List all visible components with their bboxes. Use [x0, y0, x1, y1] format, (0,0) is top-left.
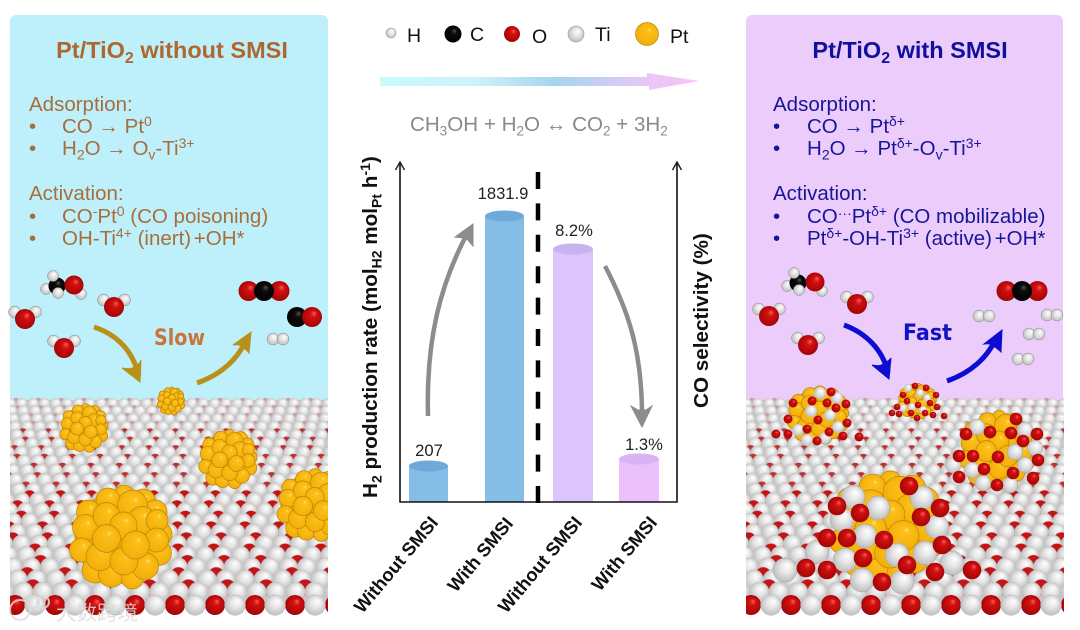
- text block: adsorption with SMSI: δ+: [889, 113, 905, 129]
- legend: atom key: Pt: [670, 26, 689, 48]
- legend: atom key: O: [532, 26, 547, 48]
- panel title: with SMSI: Pt/TiO: [812, 37, 881, 63]
- text block: adsorption with SMSI: [773, 93, 982, 162]
- text block: adsorption with SMSI: O → Pt: [830, 137, 897, 160]
- secondary y axis title: CO selectivity: CO selectivity (%): [690, 233, 713, 408]
- equation: methanol steam reforming: 2: [660, 124, 668, 138]
- text block: adsorption with SMSI: -O: [913, 137, 936, 160]
- panel background: without SMSI: [10, 15, 328, 601]
- arrow: gradient process arrow: [380, 73, 699, 90]
- panel title: without SMSI: Pt/TiO: [56, 37, 125, 63]
- text block: adsorption with SMSI: Adsorption:: [773, 93, 877, 116]
- TiO2 surface lattice, left: [10, 396, 328, 617]
- text block: adsorption with SMSI: δ+: [897, 135, 913, 151]
- value labels: 1831.9: [478, 184, 528, 203]
- arrow: reactants to Pt, slow: [94, 327, 141, 382]
- value labels: 1.3%: [625, 435, 663, 454]
- category labels: With SMSI: [443, 513, 517, 596]
- text block: activation with SMSI: Activation:: [773, 182, 868, 205]
- text block: activation with SMSI: δ+: [826, 225, 842, 241]
- text block: activation without SMSI: (CO poisoning): [125, 205, 268, 228]
- panel: Pt/TiO2 with SMSI: [746, 15, 1064, 617]
- arrow: selectivity decrease: [605, 266, 652, 427]
- text block: adsorption with SMSI: H: [807, 137, 822, 160]
- text block: activation without SMSI: (inert): [132, 227, 191, 250]
- arrow: reactants to Pt, fast: [844, 325, 891, 379]
- panel title: without SMSI: without SMSI: [134, 37, 288, 63]
- text block: activation with SMSI: δ+: [871, 203, 887, 219]
- divider: dashed line between metrics: [536, 172, 540, 503]
- product molecules, right: [973, 281, 1063, 365]
- label: Fast: Fast: [903, 320, 952, 346]
- category labels: Without SMSI: [493, 512, 586, 617]
- text block: adsorption with SMSI: •: [773, 137, 780, 160]
- y axis title: H2 production rate: 2: [368, 475, 384, 483]
- chart: H2 production rate and CO selectivity: [349, 156, 713, 617]
- y axis title: H2 production rate: Pt: [368, 194, 384, 208]
- value labels: 8.2%: [555, 221, 593, 240]
- text block: activation with SMSI: -OH-Ti: [842, 227, 903, 250]
- axes: [396, 162, 682, 502]
- text block: adsorption without SMSI: Adsorption:: [29, 93, 133, 116]
- y axis title: H2 production rate: H: [359, 483, 382, 498]
- text block: adsorption without SMSI: O → O: [85, 137, 148, 160]
- y axis title: H2 production rate: H2: [368, 250, 384, 268]
- text block: activation without SMSI: Activation:: [29, 182, 124, 205]
- text block: activation with SMSI: •: [773, 205, 780, 228]
- equation: methanol steam reforming: OH + H: [447, 113, 516, 136]
- category labels: With SMSI: [587, 512, 661, 595]
- encapsulated small Pt cluster: [889, 383, 947, 421]
- y axis title: H2 production rate: ): [359, 156, 382, 163]
- text block: adsorption without SMSI: •: [29, 137, 36, 160]
- text block: adsorption without SMSI: H: [62, 137, 77, 160]
- text block: activation without SMSI: -: [93, 203, 98, 219]
- bar: CO selectivity with SMSI: [619, 454, 659, 502]
- y axis title: H2 production rate: production rate (mol: [359, 268, 382, 475]
- text block: adsorption without SMSI: 0: [144, 113, 152, 129]
- text block: activation with SMSI: +OH*: [989, 227, 1045, 250]
- text block: activation with SMSI: Pt: [852, 205, 871, 228]
- text block: activation with SMSI: [773, 182, 1045, 250]
- encapsulated upper-left Pt cluster: [772, 386, 864, 449]
- legend: atom key: Ti: [595, 24, 611, 46]
- text block: activation without SMSI: 4+: [116, 225, 132, 241]
- equation: methanol steam reforming: O ↔ CO: [524, 113, 603, 136]
- text block: adsorption without SMSI: 3+: [179, 135, 195, 151]
- text block: adsorption with SMSI: 3+: [966, 135, 982, 151]
- value labels: [415, 184, 663, 460]
- Pt clusters on support, left: [60, 387, 349, 589]
- text block: activation with SMSI: CO: [807, 205, 838, 228]
- legend: atom key: H: [407, 25, 421, 47]
- encapsulated large Pt cluster: [773, 471, 981, 594]
- text block: adsorption with SMSI: -Ti: [943, 137, 966, 160]
- panel title: without SMSI: 2: [125, 50, 134, 67]
- text block: adsorption with SMSI: CO → Pt: [807, 115, 889, 138]
- text block: activation with SMSI: (CO mobilizable): [887, 205, 1045, 228]
- y axis title: H2 production rate: -1: [357, 163, 373, 176]
- text block: adsorption without SMSI: -Ti: [155, 137, 179, 160]
- arrow: Pt to products, slow: [197, 332, 251, 383]
- equation: methanol steam reforming: 2: [603, 124, 610, 138]
- equation: methanol steam reforming: + 3H: [610, 113, 660, 136]
- equation: methanol steam reforming: CH: [410, 113, 440, 136]
- category labels: Without SMSI: [349, 512, 442, 617]
- text block: adsorption without SMSI: •: [29, 115, 36, 138]
- text block: activation without SMSI: +OH*: [188, 227, 245, 250]
- reactant molecules, left: [8, 270, 130, 358]
- equation: methanol steam reforming: 3: [440, 124, 447, 138]
- panel title: with SMSI: with SMSI: [890, 37, 1008, 63]
- text block: activation without SMSI: •: [29, 205, 36, 228]
- text block: activation without SMSI: 0: [117, 203, 125, 219]
- text block: activation without SMSI: OH-Ti: [62, 227, 116, 250]
- text block: adsorption with SMSI: v: [936, 146, 943, 162]
- watermark icon: [10, 596, 49, 620]
- text block: activation with SMSI: (active): [919, 227, 992, 250]
- panel background: with SMSI: [746, 15, 1063, 601]
- equation: methanol steam reforming: 2: [516, 124, 524, 138]
- text block: adsorption without SMSI: v: [148, 146, 155, 162]
- panel title: with SMSI: 2: [881, 50, 890, 67]
- text block: adsorption with SMSI: •: [773, 115, 780, 138]
- text block: activation with SMSI: 3+: [903, 225, 919, 241]
- text block: adsorption without SMSI: CO → Pt: [62, 115, 144, 138]
- bar: H2 rate with SMSI: [485, 210, 524, 502]
- encapsulated right Pt cluster: [945, 410, 1044, 493]
- text block: activation with SMSI: ···: [838, 205, 852, 221]
- arrow: rate increase: [428, 224, 473, 416]
- y axis title: H2 production rate: h: [359, 176, 382, 194]
- text block: adsorption without SMSI: 2: [77, 146, 85, 162]
- TiO2 surface lattice, right: [746, 396, 1064, 617]
- legend: atom key: C: [470, 24, 484, 46]
- text block: activation without SMSI: CO: [62, 205, 93, 228]
- reactant molecules, right: [752, 268, 874, 355]
- text block: activation without SMSI: •: [29, 227, 36, 250]
- value labels: 207: [415, 441, 443, 460]
- panel: Pt/TiO2 without SMSI: [8, 15, 349, 617]
- label: Slow: Slow: [154, 325, 205, 351]
- watermark text: 大数跨境: [56, 602, 138, 625]
- text block: activation without SMSI: [29, 182, 268, 250]
- watermark: [10, 596, 138, 625]
- panel: legend and reaction: [380, 22, 699, 138]
- category labels: [349, 512, 661, 617]
- text block: activation with SMSI: Pt: [807, 227, 826, 250]
- text block: activation with SMSI: •: [773, 227, 780, 250]
- product molecules, left: [238, 281, 322, 345]
- legend: atom key: [386, 22, 689, 48]
- text block: adsorption with SMSI: 2: [822, 146, 830, 162]
- text block: adsorption without SMSI: [29, 93, 195, 162]
- bar: CO selectivity without SMSI: [553, 244, 593, 502]
- y axis title: H2 production rate: mol: [359, 208, 382, 250]
- text block: activation without SMSI: Pt: [97, 205, 117, 228]
- bar: H2 rate without SMSI: [409, 460, 448, 502]
- arrow: Pt to products, fast: [947, 330, 1002, 381]
